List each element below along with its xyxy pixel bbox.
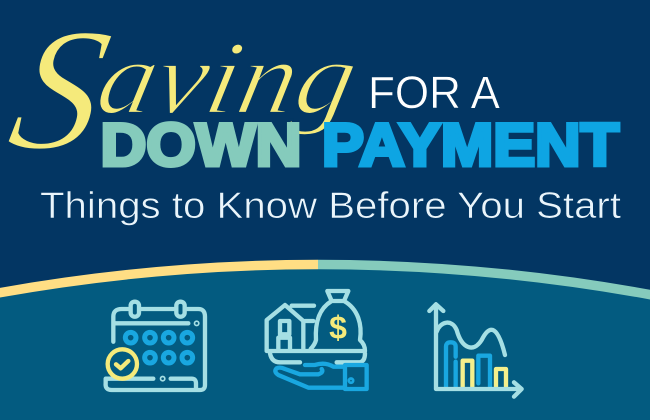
hand: [275, 364, 367, 389]
title word: FOR A: FOR A: [368, 67, 500, 118]
title line: DOWN PAYMENT: [100, 112, 619, 178]
icon: bar chart with trend curve: [429, 304, 522, 397]
dollar sign: $: [329, 309, 347, 345]
calendar outline: [106, 302, 205, 390]
word: DOWN: DOWN: [100, 112, 302, 178]
house, bag and tray: [267, 291, 365, 362]
check badge: [108, 349, 137, 379]
script title word: Saving: aving: [88, 19, 368, 136]
lower teal panel: [0, 263, 650, 420]
yellow bars: [463, 361, 506, 387]
icon: calendar with check mark: [106, 302, 205, 390]
curved divider: yellow and mint arc: [0, 264, 650, 295]
axes and trend line: [429, 304, 522, 397]
calendar date dots: [125, 332, 193, 363]
blue bars: [446, 342, 490, 387]
subtitle: Things to Know Before You Start: [40, 185, 622, 226]
icon: hand holding house and money bag: [267, 291, 367, 389]
word: PAYMENT: PAYMENT: [322, 112, 619, 178]
